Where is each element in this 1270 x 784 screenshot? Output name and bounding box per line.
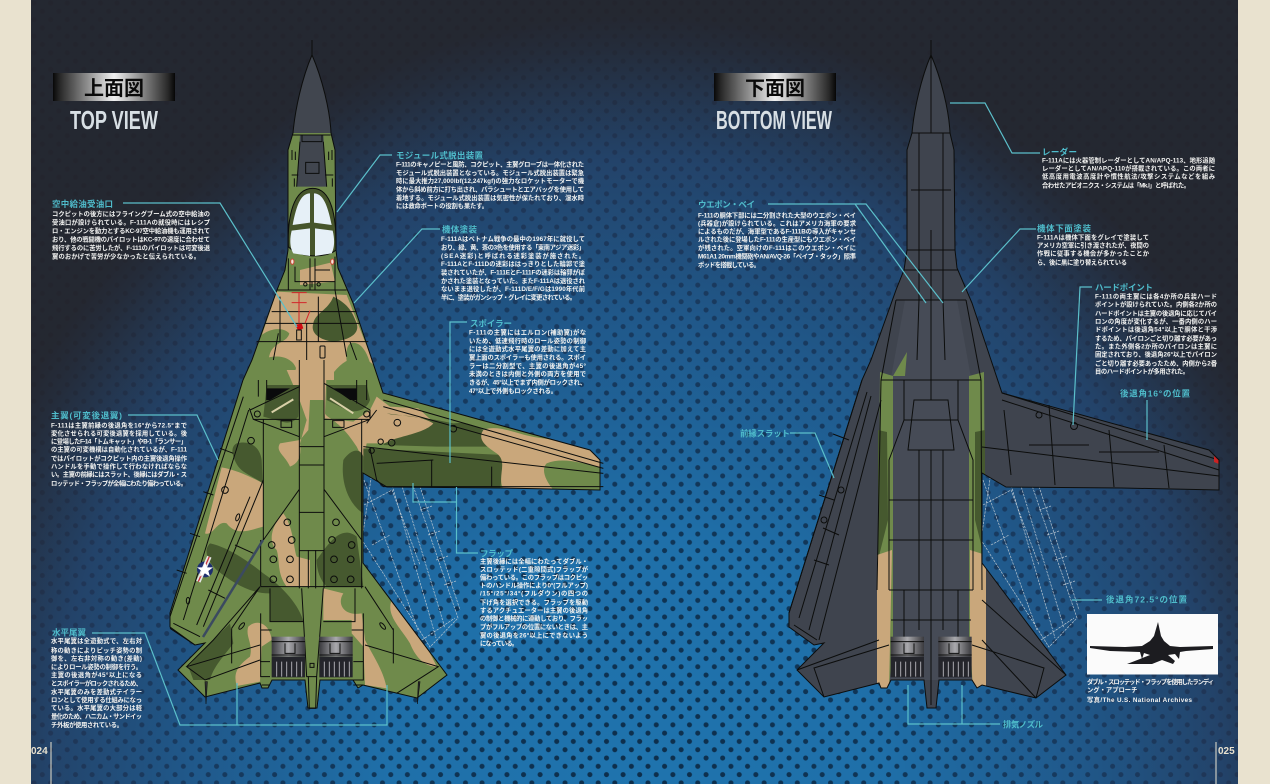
body: 未満のときは内側と外側の両方を使用で [469, 369, 586, 378]
heading: 主翼(可変後退翼) [51, 410, 122, 420]
forward spine [292, 135, 333, 187]
photo caption [1087, 677, 1214, 704]
body: おり、緑、黄、茶の3色を使用する「東南アジア迷彩」 [441, 242, 585, 252]
body: 飛行するのに苦労したが、F-111のパイロットは可変後退 [52, 243, 211, 252]
aircraft: bottom view [780, 40, 1230, 720]
title english: TOP VIEW [70, 105, 158, 135]
camouflage [170, 133, 600, 708]
body: F-111Aはベトナム戦争の最中の1967年に就役して [441, 234, 585, 243]
body: 下げ角を選択できる。フラップを駆動 [480, 598, 588, 606]
leader lines: top view [92, 155, 478, 725]
text: radar [1042, 147, 1216, 190]
heading: スポイラー [470, 318, 512, 328]
central fuselage shade [887, 300, 975, 680]
body: い。主翼の前縁にはスラット、後縁にはダブル・ス [51, 470, 187, 478]
photo caption: ダブル・スロッテッド・フラップを使用したランディ [1087, 677, 1214, 686]
body: 翼のおかげで苦労が少なかったと伝えられている。 [52, 252, 200, 260]
bottom-view panel lines [789, 40, 1219, 708]
body [51, 420, 188, 488]
body, wing and tail panel lines [170, 360, 603, 708]
heading: 機体塗装 [442, 224, 477, 234]
probe and outline [311, 40, 313, 55]
body: 固定されており、後退角26°以上でパイロン [1095, 350, 1217, 358]
radome [293, 55, 331, 133]
text: underside paint [1037, 224, 1150, 266]
body: ルされた後に登場したF-111の生産型にもウエポン・ベイ [698, 234, 856, 244]
body: きるが、45°以上でまず内側がロックされ、 [469, 378, 586, 386]
label: exhaust nozzle: 排気ノズル [1003, 720, 1043, 730]
photo caption: ング・アプローチ [1087, 685, 1137, 694]
body: M61A1 20mm機関砲やAN/AVQ-26「ペイブ・タック」照準 [698, 252, 857, 260]
page number right: 025 [1218, 746, 1235, 757]
title: bottom view [714, 73, 836, 135]
body: 称の動きによりピッチ姿勢の制 [51, 646, 142, 654]
body: 量化のため、ハニカム・サンドイッ [51, 712, 142, 720]
body: 備わっている。このフラップはコクピッ [480, 572, 588, 582]
body: ロッテッド・フラップが全幅にわたり備わっている。 [51, 478, 187, 488]
body: 水平尾翼は全遊動式で、左右対 [51, 636, 143, 645]
body: トのハンドル操作により0°(フルアップ) [480, 580, 588, 590]
heading: レーダー [1042, 147, 1077, 157]
label: leading edge slat: 前縁スラット [740, 428, 790, 438]
body: ている。水平尾翼の大部分は軽 [51, 703, 143, 712]
text: main wing [51, 410, 188, 488]
body: 合わせたアビオニクス・システムは「Mk.I」と呼ばれた。 [1042, 180, 1190, 190]
body: ないまま退役したが、F-111D/E/F/Gは1990年代前 [441, 284, 586, 293]
body [396, 160, 585, 210]
body: ハードポイントは主翼の後退角に応じてパイ [1095, 308, 1217, 318]
aircraft: top view [160, 40, 610, 720]
body: モジュール式脱出装置となっている。モジュール式脱出装置は緊急 [396, 168, 585, 177]
body [1037, 232, 1150, 266]
phantom wing outline swept position, top view [362, 397, 460, 647]
body: 時に最大推力27,000lbf(12,247kgf)の強力なロケットモーターで機 [396, 176, 585, 185]
body: するアクチュエーターは主翼の後退角 [480, 606, 588, 614]
body: になっている。 [480, 638, 518, 648]
body: 翼の後退角を26°以上にできないよう [480, 630, 588, 640]
rear cockpit panel lines and red markings [257, 257, 368, 360]
page number left [31, 742, 51, 784]
page number left: 024 [31, 746, 48, 757]
page number right [1216, 742, 1235, 784]
body: ロンの角度が変化するが、一番内側のハー [1095, 316, 1217, 326]
body: F-111は主翼前縁の後退角を16°から72.5°まで [51, 420, 187, 430]
body: F-111Aには火器管制レーダーとしてAN/APQ-113、地形追随 [1042, 156, 1216, 164]
body: によりロール姿勢の制御を行う。 [51, 662, 142, 671]
body: いため、低速飛行時のロール姿勢の制御 [469, 336, 587, 345]
body: 47°以上で外側もロックされる。 [469, 386, 557, 395]
body: の主翼の可変機構は自動化されているが、F-111 [51, 444, 187, 454]
body: F-111の両主翼には各4か所の兵装ハード [1095, 292, 1217, 300]
body: F-111の主翼にはエルロン(補助翼)がな [469, 328, 586, 336]
leader lines: bottom view [768, 103, 1147, 724]
body: ロ・エンジンを動力とするKC-97空中給油機も運用されて [52, 226, 210, 235]
body: によるものだが、海軍型であるF-111Bの導入がキャンセ [698, 226, 856, 236]
body: アメリカ空軍に引き渡されたが、夜間の [1037, 240, 1149, 250]
upper fuselage camouflage [262, 262, 373, 380]
body [698, 210, 857, 269]
body: F-111の胴体下部には二分割された大型のウエポン・ベイ [698, 210, 856, 220]
body: 主翼後縁には全幅にわたってダブル・ [480, 556, 588, 566]
label: sweep 16 position: 後退角16°の位置 [1120, 388, 1190, 398]
body: 作戦に従事する機会が多かったことか [1037, 248, 1150, 258]
body [480, 556, 589, 648]
heading: フラップ [480, 548, 513, 558]
phantom wing outline swept position, bottom view [981, 397, 1079, 647]
body: 受油口が設けられている。F-111Aの就役時にはレシプ [52, 218, 211, 226]
body: F-111AとF-111Dの迷彩ははっきりとした輪郭で塗 [441, 259, 586, 268]
body: ポイントが設けられていた。内側各2か所の [1095, 300, 1217, 308]
heading: ウエポン・ベイ [698, 200, 755, 210]
body: ポッドを搭載している。 [698, 260, 760, 269]
text: spoiler [469, 318, 587, 395]
text: escape module [396, 150, 585, 210]
heading: ハードポイント [1095, 282, 1153, 292]
text: aerial refueling [52, 199, 211, 260]
insignia [197, 557, 213, 582]
text: paint scheme [441, 224, 586, 302]
body: 翼上面のスポイラーも使用される。スポイ [469, 352, 586, 362]
body: 体から斜め前方に打ち出され、パラシュートとエアバッグを使用して [396, 184, 584, 194]
body: チ外板が使用されている。 [51, 720, 123, 729]
body: ラーは二分割型で、主翼の後退角が45° [469, 361, 586, 370]
body: 主翼の後退角が45°以上になる [51, 670, 142, 679]
body: F-111Aは機体下面をグレイで塗装して [1037, 232, 1149, 242]
photo: landing approach [1087, 614, 1218, 674]
body: かされた塗装となっていた。またF-111Aは退役され [441, 276, 586, 285]
body: スロッテッド(二重隙間式)フラップが [480, 564, 589, 574]
text: hardpoints [1095, 282, 1218, 376]
heading: 空中給油受油口 [52, 199, 113, 209]
body: の制御と機械的に連動しており、フラッ [480, 614, 588, 622]
wing slit [203, 540, 263, 637]
text: weapon bay [698, 200, 857, 269]
body: ごと切り離す必要あったため、内側から2番 [1095, 358, 1218, 368]
label: sweep 72.5 position: 後退角72.5°の位置 [1106, 594, 1187, 604]
body: 低高度用電波高度計や慣性航法/攻撃システムなどを組み [1042, 172, 1216, 180]
body: ハンドルを手動で操作して行わなければならな [51, 462, 187, 470]
body [51, 636, 143, 729]
body: コクピットの後方にはフライングブーム式の空中給油の [52, 209, 210, 218]
heading: 機体下面塗装 [1037, 224, 1091, 234]
body [1042, 156, 1216, 190]
body: おり、他の戦闘機のパイロットはKC-97の速度に合わせて [52, 234, 210, 244]
text: horizontal stabilizer [51, 628, 143, 729]
body: 着地する。モジュール式脱出装置は気密性が保たれており、湿水時 [396, 193, 585, 202]
title band: 上面図 [84, 77, 144, 100]
title band: 下面図 [745, 78, 805, 100]
body [469, 328, 587, 395]
body: とスポイラーがロックされるため、 [51, 678, 142, 688]
body: (SEA迷彩)と呼ばれる迷彩塗装が施された。 [441, 251, 585, 260]
body: ロンとして使用する仕組みになっ [51, 695, 142, 704]
body: ら、後に黒に塗り替えられている [1037, 258, 1127, 266]
body [52, 209, 211, 260]
body: レーダーとしてAN/APQ-110が搭載されている。この両者に [1042, 164, 1215, 172]
heading: モジュール式脱出装置 [396, 150, 483, 160]
photo caption: 写真/The U.S. National Archives [1087, 695, 1192, 704]
body: 目のハードポイントが多用された。 [1095, 366, 1189, 376]
body: 変化させられる可変後退翼を採用している。後 [51, 428, 188, 438]
body: ドポイントは後退角54°以上で胴体と干渉 [1095, 324, 1218, 334]
title english: BOTTOM VIEW [716, 105, 832, 135]
body: には救命ボートの役割も果たす。 [396, 201, 488, 210]
body: F-111のキャノピーと風防、コクピット、主翼グローブは一体化された [396, 160, 584, 168]
body [1095, 292, 1218, 376]
body: には全遊動式水平尾翼の差動に加えて主 [469, 344, 586, 353]
body: に登場したF-14「トムキャット」やB-1「ランサー」 [51, 436, 187, 446]
body: が残された。空軍向けのF-111はこのウエポン・ベイに [698, 243, 856, 252]
text: flap [480, 548, 589, 648]
body [441, 234, 586, 302]
body: 半に、塗装がガンシップ・グレイに変更されている。 [441, 292, 576, 302]
body: /15°/25°/34°(フルダウン)の四つの [480, 588, 588, 598]
body: 水平尾翼のみを差動式テイラー [51, 687, 142, 696]
lower body and wings camouflage [188, 370, 603, 688]
body: するため、パイロンごと切り離す必要があっ [1095, 334, 1217, 342]
heading: 水平尾翼 [52, 628, 86, 638]
green and tan fuselage stripes [880, 372, 893, 682]
body: た。また外側各2か所のパイロンは主翼に [1095, 342, 1217, 350]
body: プがフルアップの位置にないときは、主 [480, 622, 588, 631]
body: 御を、左右非対称の動き(差動) [51, 654, 142, 662]
canopy [288, 188, 336, 264]
body: ではパイロットがコクピット内の主翼後退角操作 [51, 454, 188, 462]
title: top view [53, 73, 175, 135]
gray underside [780, 40, 1230, 720]
body: 装されていたが、F-111EとF-111Fの迷彩は輪郭がぼ [441, 268, 586, 276]
body: (兵器倉)が設けられている。これはアメリカ海軍の要求 [698, 218, 857, 228]
green patches at the wing roots [247, 356, 378, 380]
